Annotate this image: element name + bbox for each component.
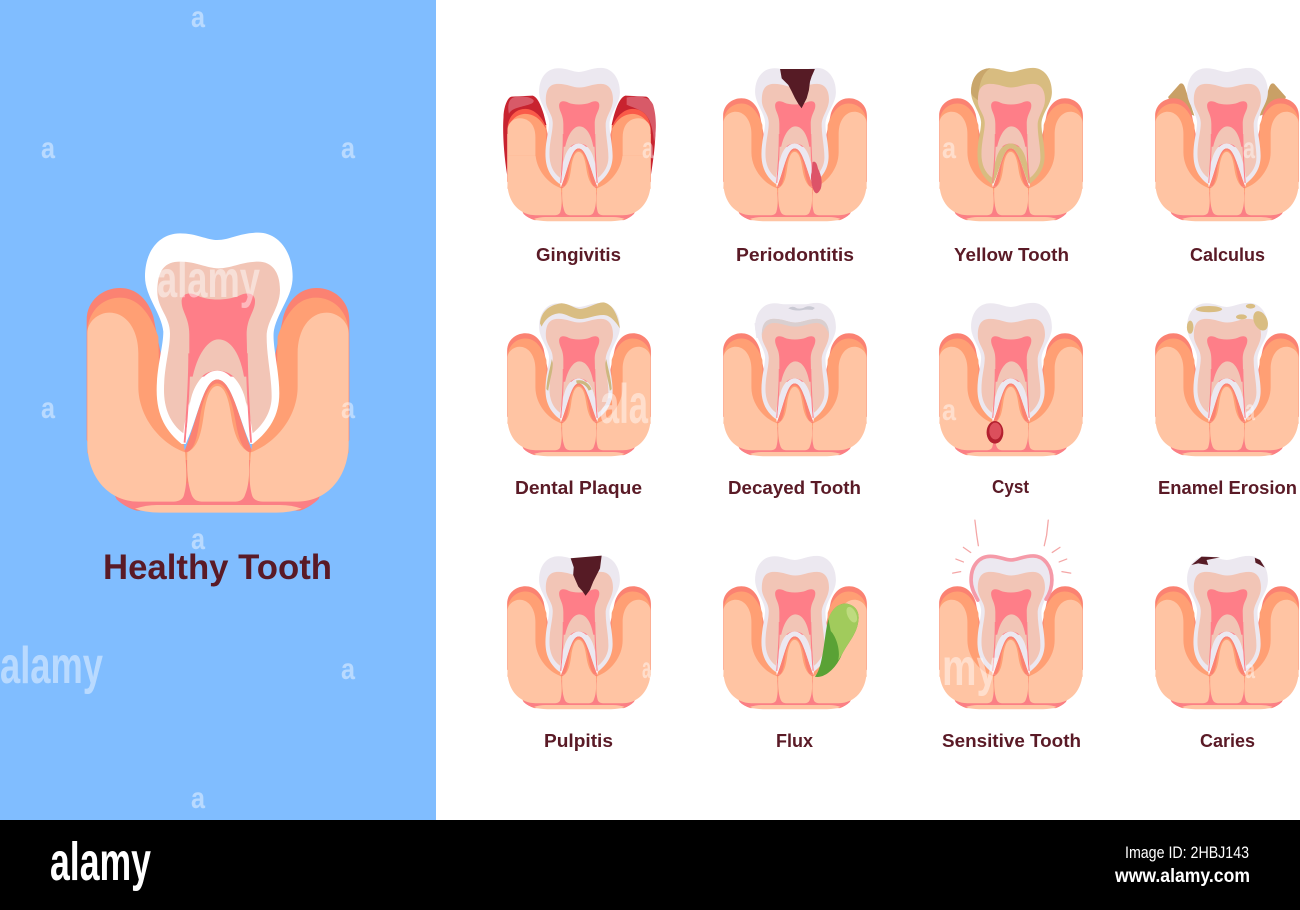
label: Gingivitis: Gingivitis bbox=[536, 245, 621, 265]
tooth: flux bbox=[723, 556, 867, 709]
heading: Healthy Tooth: Healthy Tooth bbox=[103, 548, 332, 587]
left panel background bbox=[0, 0, 436, 820]
watermark overlay: alamy bbox=[157, 251, 260, 309]
label: Yellow Tooth: Yellow Tooth bbox=[954, 245, 1069, 265]
label: Sensitive Tooth: Sensitive Tooth bbox=[942, 731, 1081, 751]
watermark overlay: a bbox=[1245, 654, 1255, 684]
tooth: calculus bbox=[1155, 68, 1299, 221]
watermark overlay: a bbox=[191, 523, 205, 556]
tooth: enamel erosion bbox=[1155, 303, 1299, 456]
tooth: decayed tooth bbox=[723, 303, 867, 456]
tooth: caries bbox=[1155, 556, 1299, 709]
watermark overlay: alamy bbox=[0, 637, 103, 695]
tooth: gingivitis bbox=[503, 68, 656, 221]
tooth: periodontitis bbox=[723, 68, 867, 221]
tooth: cyst bbox=[939, 303, 1083, 456]
label: Cyst: Cyst bbox=[992, 477, 1029, 497]
watermark overlay: my bbox=[942, 639, 998, 697]
watermark overlay: a bbox=[341, 132, 355, 165]
watermark overlay: a bbox=[642, 652, 651, 685]
tooth: yellow tooth bbox=[939, 68, 1083, 221]
label: Periodontitis: Periodontitis bbox=[736, 245, 854, 265]
label: Calculus: Calculus bbox=[1190, 245, 1265, 265]
watermark overlay: a bbox=[191, 782, 205, 815]
footer bar bbox=[0, 820, 1300, 910]
watermark overlay: a bbox=[191, 1, 205, 34]
footer url: www.alamy.com bbox=[1114, 866, 1250, 887]
watermark overlay: a bbox=[341, 392, 355, 425]
watermark overlay: a bbox=[642, 132, 654, 165]
watermark overlay: a bbox=[41, 132, 55, 165]
label: Dental Plaque: Dental Plaque bbox=[515, 478, 642, 498]
watermark overlay: a bbox=[341, 653, 355, 686]
watermark overlay: a bbox=[942, 394, 956, 427]
label: Pulpitis: Pulpitis bbox=[544, 731, 613, 751]
label: Flux: Flux bbox=[776, 731, 813, 751]
watermark overlay: ala bbox=[600, 372, 649, 435]
footer image id: Image ID: 2HBJ143 bbox=[1125, 843, 1249, 862]
label: Enamel Erosion: Enamel Erosion bbox=[1158, 478, 1297, 498]
tooth: dental plaque bbox=[507, 302, 651, 456]
hero illustration: healthy tooth bbox=[87, 233, 349, 513]
tooth: pulpitis bbox=[507, 556, 651, 709]
footer logo: alamy: alamy bbox=[50, 832, 151, 892]
watermark overlay: a bbox=[1243, 132, 1255, 165]
watermark overlay: a bbox=[942, 132, 956, 165]
tooth: sensitive tooth with pain rays bbox=[939, 520, 1083, 709]
label: Decayed Tooth: Decayed Tooth bbox=[728, 478, 861, 498]
watermark overlay: a bbox=[1245, 394, 1255, 427]
label: Caries: Caries bbox=[1200, 731, 1255, 751]
watermark overlay: a bbox=[41, 392, 55, 425]
